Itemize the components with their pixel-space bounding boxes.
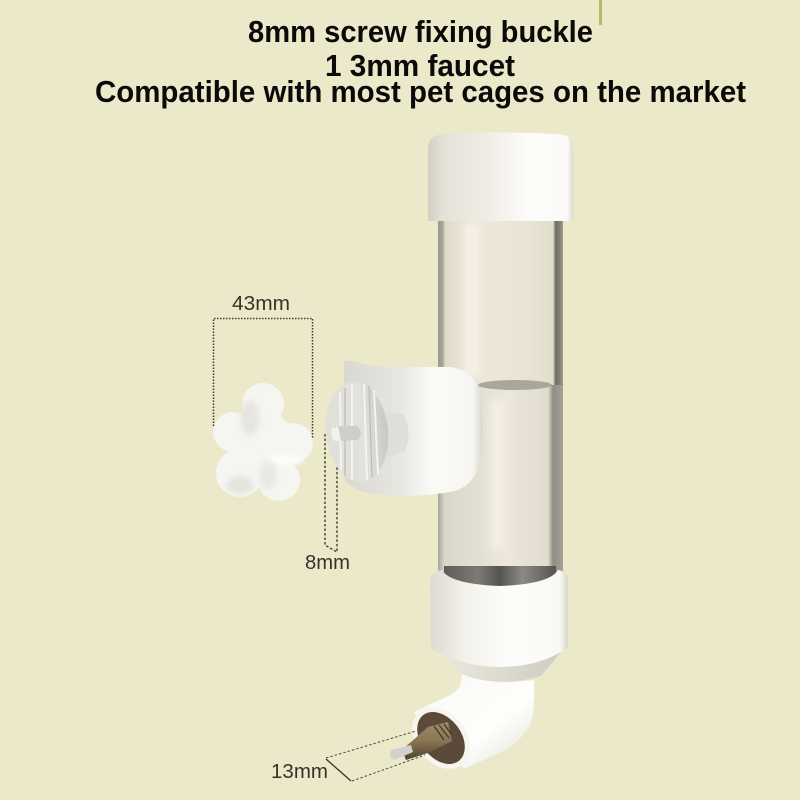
green line at top	[599, 0, 602, 25]
clamp band	[344, 361, 483, 496]
tube highlight	[464, 225, 480, 375]
faucet elbow	[414, 674, 534, 769]
title text: Compatible with most pet cages on the market	[95, 74, 746, 109]
dimension: 8mm: 8mm	[305, 552, 350, 574]
water	[438, 380, 563, 586]
bottle	[390, 132, 573, 780]
clear tube	[438, 215, 563, 390]
dimension: 8mm	[305, 434, 350, 574]
dimension: 13mm: 13mm	[271, 761, 328, 783]
top cap	[428, 132, 573, 221]
title text: 8mm screw fixing buckle	[248, 14, 593, 49]
faucet opening	[400, 696, 482, 780]
knob	[213, 383, 313, 501]
clamp neck	[385, 412, 409, 458]
screw disc	[321, 379, 393, 485]
collar cone	[436, 652, 561, 682]
bottom collar	[430, 570, 568, 667]
screw pin	[331, 426, 361, 441]
dimension: 43mm	[214, 293, 312, 439]
title text: 1 3mm faucet	[325, 48, 515, 83]
brass nozzle	[390, 722, 452, 760]
clamp	[321, 361, 483, 496]
dimension: 13mm	[271, 731, 425, 783]
dimension: 43mm: 43mm	[232, 293, 290, 315]
title text	[95, 14, 746, 109]
